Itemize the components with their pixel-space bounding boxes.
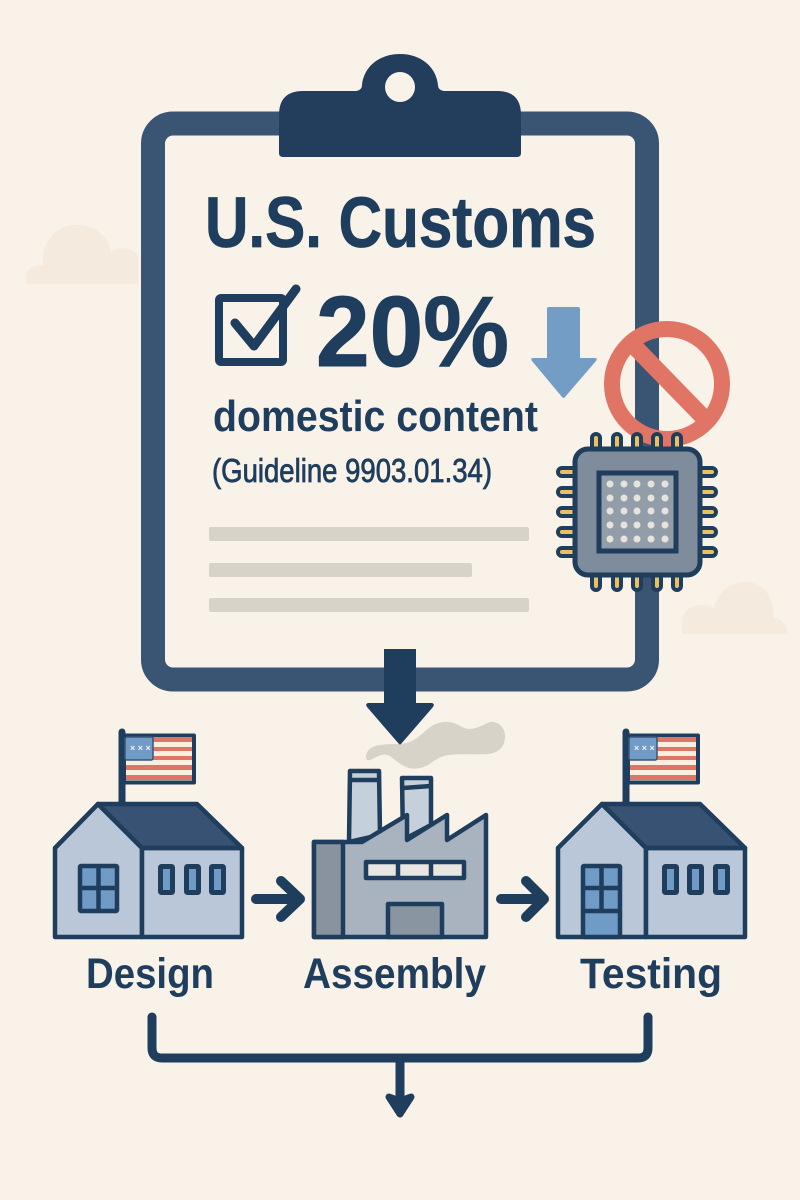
label: design: Design xyxy=(86,950,214,998)
20 percent figure: 20% xyxy=(316,276,509,388)
bracket joining the three stages xyxy=(152,1017,648,1058)
clipboard clip xyxy=(279,54,521,157)
guideline reference: (Guideline 9903.01.34) xyxy=(212,452,492,489)
small windows xyxy=(664,866,728,892)
flag: × × × xyxy=(130,743,151,753)
title: U.S. Customs xyxy=(205,184,596,263)
chimneys xyxy=(349,771,431,842)
factory body xyxy=(314,815,486,937)
house walls and roof xyxy=(55,804,242,937)
testing house with flag xyxy=(558,732,745,937)
decorative cloud: right xyxy=(682,582,788,634)
icon: checkbox with check mark xyxy=(219,289,296,362)
decorative cloud: left xyxy=(26,225,138,284)
house walls and roof xyxy=(558,804,745,937)
clipboard xyxy=(153,54,647,680)
arrow: design to assembly xyxy=(256,881,300,917)
window xyxy=(80,866,117,911)
big arrow from clipboard to factory xyxy=(366,649,434,744)
icon: smoke xyxy=(366,722,505,769)
flag: × × × xyxy=(634,743,655,753)
icon: semiconductor chip xyxy=(558,434,716,590)
domestic content label: domestic content xyxy=(213,392,538,441)
label: assembly: Assembly xyxy=(303,950,486,998)
design house with flag xyxy=(55,732,242,937)
small windows xyxy=(160,866,224,892)
flag xyxy=(122,732,194,804)
factory window strip xyxy=(366,862,464,878)
door with panes xyxy=(583,866,620,937)
arrow: assembly to testing xyxy=(501,881,544,917)
icon: prohibition sign xyxy=(612,329,722,439)
assembly factory xyxy=(314,771,486,937)
factory door xyxy=(388,904,442,937)
label: testing: Testing xyxy=(580,950,722,998)
arrow: bracket downward xyxy=(389,1060,411,1114)
placeholder text lines xyxy=(209,527,529,612)
flag xyxy=(626,732,698,804)
icon: blue down arrow xyxy=(531,307,597,398)
